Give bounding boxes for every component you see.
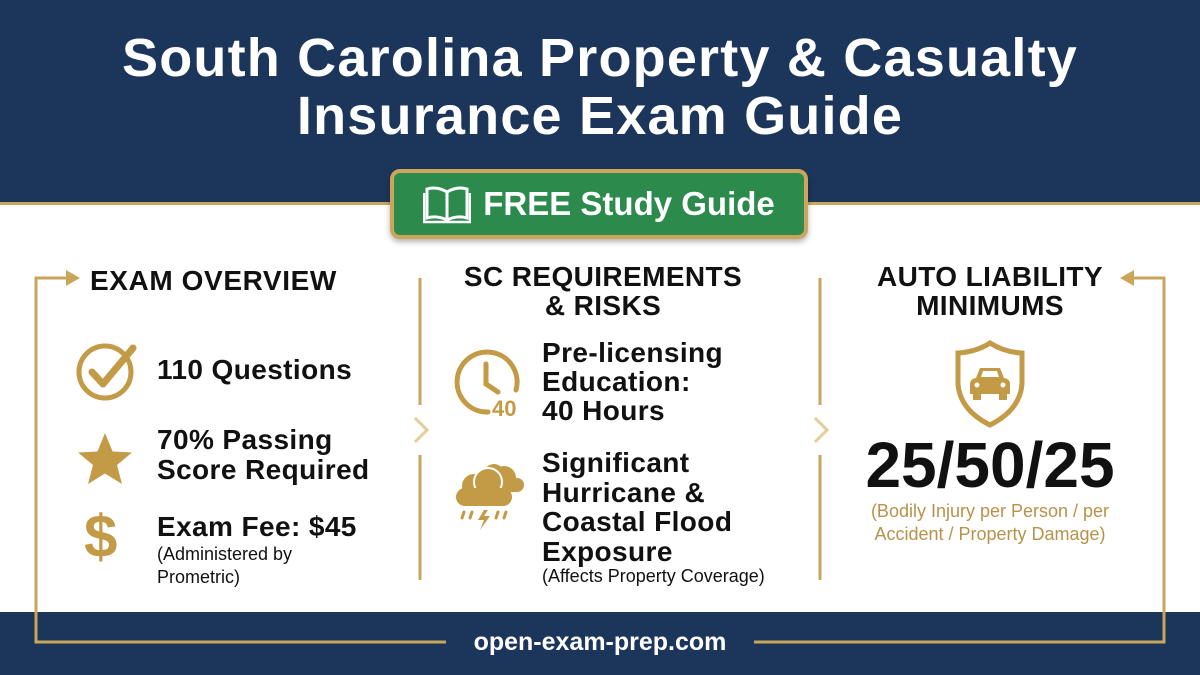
text: pre-licensing: Pre-licensing (542, 337, 723, 368)
heading: AUTO LIABILITY (877, 261, 1103, 292)
panel: exam overview (76, 265, 370, 587)
title: Insurance Exam Guide (297, 86, 903, 146)
title (122, 28, 1078, 146)
panel: exam overview: Prometric) (157, 567, 240, 587)
text: pre-licensing: Education: (542, 366, 691, 397)
heading: & RISKS (545, 290, 661, 321)
text: hurricane: Exposure (542, 536, 673, 566)
icon: open book (423, 186, 471, 224)
text: coverage description: (Bodily Injury per Person / per (871, 501, 1109, 521)
footer band (0, 612, 1200, 675)
text: pre-licensing: 40 Hours (542, 395, 665, 426)
text: hurricane: Coastal Flood (542, 506, 732, 537)
icon: star (78, 433, 132, 484)
text: passing score (157, 424, 370, 485)
footer url: open-exam-prep.com (474, 628, 726, 656)
panel: auto liability (865, 261, 1115, 544)
icon: storm cloud (456, 464, 524, 530)
text: coverage description (871, 501, 1109, 544)
icon: check (76, 344, 136, 400)
heading (877, 261, 1103, 321)
number: 25/50/25: 25/50/25 (865, 429, 1115, 501)
icon: shield car (956, 340, 1024, 428)
footer frame lines (34, 598, 1166, 644)
panel: sc requirements: (Affects Property Coverage) (542, 566, 765, 586)
panel: exam overview: (Administered by (157, 544, 292, 564)
text: 110 questions: 110 Questions (157, 354, 352, 385)
header band (0, 0, 1200, 205)
heading: SC REQUIREMENTS (464, 261, 742, 292)
text: hurricane (542, 447, 732, 567)
button: free study guide: FREE Study Guide (483, 185, 775, 222)
icon: clock 40 (454, 350, 520, 418)
button: free study guide (390, 169, 808, 239)
text: hurricane: Significant (542, 447, 690, 478)
heading: EXAM OVERVIEW (90, 265, 337, 296)
text: passing score: 70% Passing (157, 424, 333, 455)
text: hurricane: Hurricane & (542, 476, 705, 508)
text: pre-licensing (542, 337, 723, 426)
panel: sc requirements (454, 261, 765, 586)
text: exam fee: Exam Fee: $45 (157, 511, 357, 542)
text: coverage description: Accident / Property Damage) (874, 524, 1106, 544)
heading: MINIMUMS (916, 290, 1064, 321)
heading (464, 261, 742, 321)
text: passing score: Score Required (157, 454, 370, 485)
icon: dollar: $ (84, 503, 117, 570)
title: South Carolina Property & Casualty (122, 28, 1078, 88)
